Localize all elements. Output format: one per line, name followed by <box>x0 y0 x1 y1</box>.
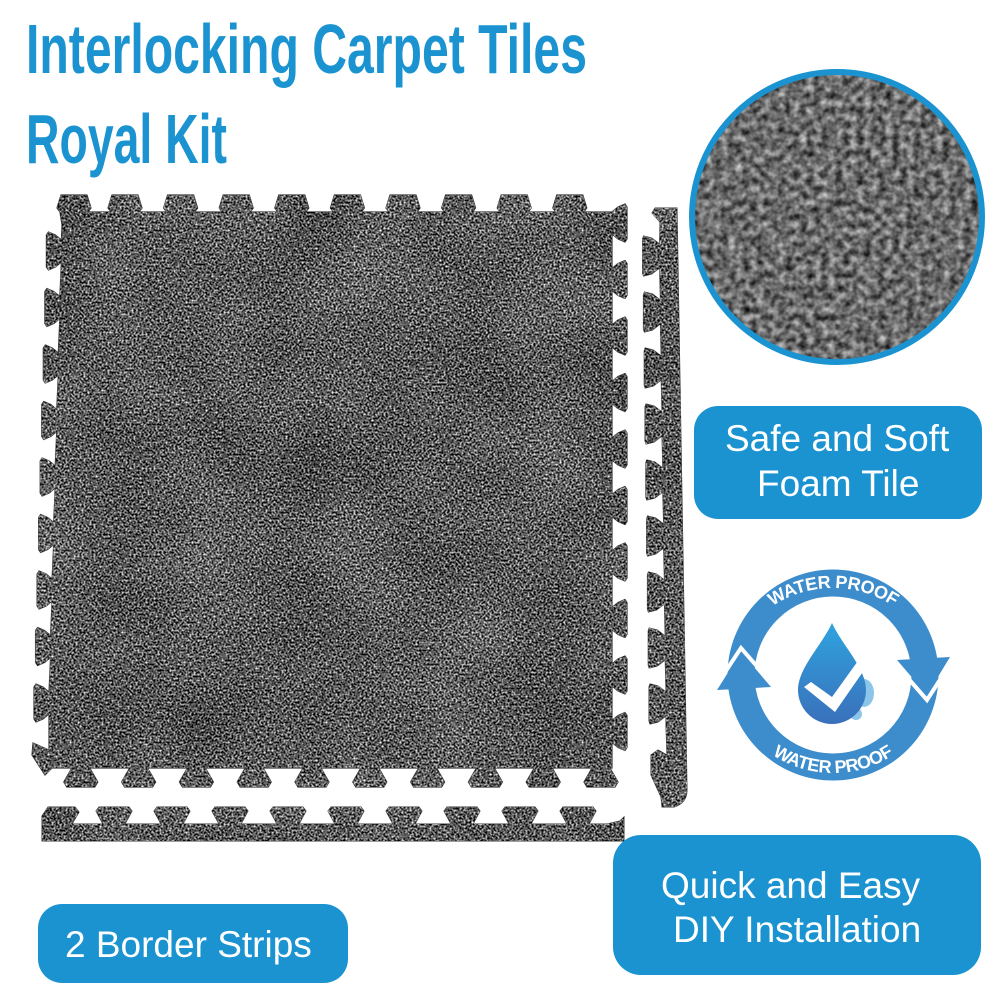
arc label: top: WATER PROOF <box>766 576 900 604</box>
arc label: bottom: WATER PROOF <box>775 744 891 774</box>
callout: quick and easy: Quick and Easy <box>661 865 920 906</box>
callout: border strips: 2 Border Strips <box>65 924 312 965</box>
icon: small droplets <box>850 679 874 720</box>
callout: safe and soft: Foam Tile <box>757 463 919 504</box>
carpet close-up circle <box>690 70 985 365</box>
callout: safe and soft: Safe and Soft <box>725 418 949 459</box>
title: Interlocking Carpet Tiles <box>26 10 587 88</box>
water proof badge <box>717 570 950 780</box>
callout: quick and easy <box>613 835 981 975</box>
icon: water drop <box>798 623 866 724</box>
callout: border strips <box>38 904 348 983</box>
bottom border strip <box>40 805 626 843</box>
title: Royal Kit <box>26 100 227 178</box>
title <box>26 10 587 178</box>
callout: quick and easy: DIY Installation <box>673 909 921 950</box>
main carpet tile <box>25 190 635 790</box>
callout: safe and soft <box>694 406 982 519</box>
right border strip <box>640 205 690 810</box>
icon: check mark <box>804 647 876 712</box>
